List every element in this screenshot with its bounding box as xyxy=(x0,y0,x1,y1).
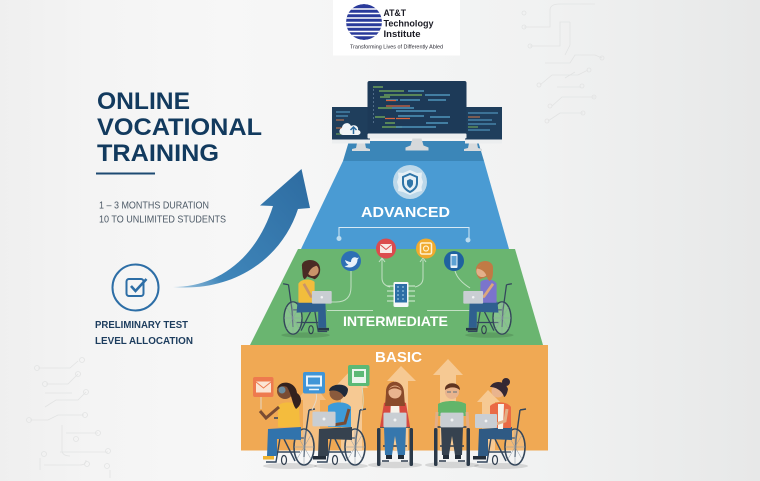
circuit pattern: lower left xyxy=(26,358,110,478)
preliminary test label: LEVEL ALLOCATION xyxy=(95,336,193,347)
monitor: left xyxy=(332,107,370,151)
icon: shield badge xyxy=(393,165,427,199)
connector lines xyxy=(326,258,470,310)
icon: tablet xyxy=(387,282,415,307)
intermediate label: INTERMEDIATE xyxy=(343,313,448,329)
logo tagline: Transforming Lives of Differently Abled xyxy=(350,44,443,50)
basic label: BASIC xyxy=(375,349,422,366)
icon: checkbox in circle xyxy=(112,264,158,310)
preliminary test label: PRELIMINARY TEST xyxy=(95,320,189,331)
icon: cloud upload xyxy=(339,123,361,135)
preliminary test label xyxy=(95,320,193,347)
bracket connector xyxy=(336,228,470,242)
title: VOCATIONAL xyxy=(97,114,262,141)
title: ONLINE xyxy=(97,88,190,115)
person: man with laptop, blue shirt xyxy=(312,385,368,469)
duration text: 10 TO UNLIMITED STUDENTS xyxy=(99,214,226,226)
duration text xyxy=(99,200,226,226)
icon: instagram xyxy=(416,238,436,258)
duration text: 1 – 3 MONTHS DURATION xyxy=(99,200,209,212)
curved arrow xyxy=(173,169,310,287)
icon: phone xyxy=(444,251,464,271)
icon: striped globe xyxy=(346,4,382,40)
person: right wheelchair user xyxy=(463,261,514,338)
person: woman centre xyxy=(368,382,422,468)
logo xyxy=(333,0,460,56)
logo name: Institute xyxy=(384,29,420,40)
circuit pattern: upper right xyxy=(522,4,604,123)
title: TRAINING xyxy=(97,140,219,167)
pyramid tier: advanced xyxy=(301,161,509,249)
advanced label: ADVANCED xyxy=(361,205,450,221)
title xyxy=(96,88,262,174)
person: woman with mail icon xyxy=(260,383,317,469)
icon: mail tag xyxy=(253,377,274,397)
logo name: Technology xyxy=(384,18,434,30)
icon: green tag xyxy=(348,365,370,410)
person: woman right xyxy=(473,378,528,469)
monitors xyxy=(332,81,502,151)
logo name: AT&T xyxy=(384,8,406,19)
monitor: centre xyxy=(368,81,466,150)
monitor: right xyxy=(464,107,502,151)
pyramid tier: top platform xyxy=(343,141,484,161)
growth arrows xyxy=(297,359,500,450)
pyramid tier: basic xyxy=(241,345,548,469)
logo name xyxy=(384,8,434,40)
icon: twitter xyxy=(341,251,361,271)
person: left wheelchair user xyxy=(281,260,332,338)
icon: mail xyxy=(376,238,396,258)
pyramid tier: intermediate xyxy=(250,238,543,345)
person: man centre xyxy=(425,383,479,468)
icon: monitor tag xyxy=(303,372,325,410)
